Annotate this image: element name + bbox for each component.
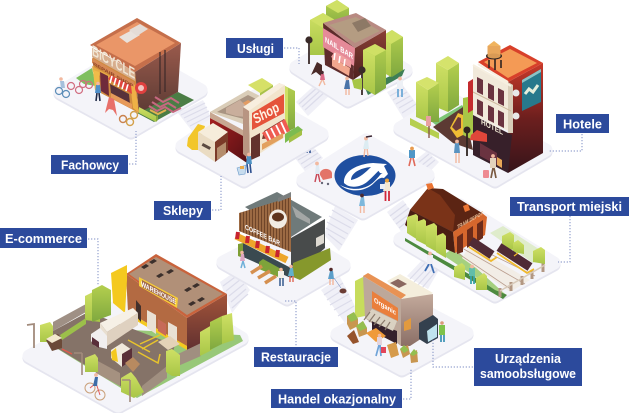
building [90,18,181,113]
people [319,71,403,97]
label: Urządzenia samoobsługowe [474,348,582,386]
hotel building [468,41,543,173]
label: Sklepy: Sklepy [163,203,204,218]
cyclist [85,373,105,400]
building: COFFEE BAR [245,222,280,248]
lamps and gate [27,324,130,402]
back bushes [310,0,403,77]
building: NAIL BAR [325,35,353,61]
front bush and lamps [305,36,386,95]
label: Restauracje [254,347,338,367]
label: Urządzenia samoobsługowe: Urządzenia [495,351,562,366]
label: Hotele [556,114,609,133]
truck and loading yard [91,308,180,372]
label: Transport miejski: Transport miejski [517,199,622,214]
panel: Restauracje coffee bar [223,192,346,300]
hotel building: HOTEL [481,116,503,137]
label: Usługi [226,38,283,58]
label: Fachowcy: Fachowcy [61,158,120,172]
building: REPAIR SHOP [93,61,134,90]
track bed [405,226,545,299]
label: Handel okazjonalny: Handel okazjonalny [278,392,397,406]
pedestrians [425,252,475,284]
lime hedges [407,214,545,290]
trams [469,241,534,273]
label: E-commerce [0,228,87,248]
building: Shop [250,99,282,127]
panel: Hotele hotel [400,41,546,182]
produce and shoppers [347,312,445,363]
panel: Usługi nail bar [296,0,406,102]
label: Fachowcy [51,155,128,174]
panel: Fachowcy bicycle repair shop [56,18,201,133]
panel: Sklepy shop [182,78,322,182]
label: Restauracje: Restauracje [261,350,331,364]
building: BICYCLE [92,42,135,83]
label: Sklepy [154,201,211,220]
depot building: TRAM DEPOT [457,211,483,231]
lime hedges [40,285,234,398]
people on the square [302,135,415,213]
label: Hotele: Hotele [563,116,602,132]
fences [53,304,201,396]
label: E-commerce: E-commerce [5,231,82,246]
logo [334,155,396,196]
stairs [178,82,439,323]
tables and customers [240,251,346,294]
dotted leader lines [88,48,582,399]
panel: Transport miejski tram depot [400,183,554,299]
panel: Handel okazjonalny market stall [337,273,467,371]
delivery truck [187,123,228,162]
hotel sign pole, lamp and guests [426,116,496,178]
building [111,254,227,352]
green blocks [410,56,473,140]
panel: E-commerce warehouse [27,254,243,408]
depot building [405,183,487,254]
building: Organic [374,296,396,317]
panel: central platform with logo [302,135,428,214]
bikes and people [56,77,181,126]
label: Usługi: Usługi [237,41,274,56]
label: Urządzenia samoobsługowe: samoobsługowe [480,366,576,381]
building: WAREHOUSE [141,279,176,306]
shopper with cart [237,153,252,175]
